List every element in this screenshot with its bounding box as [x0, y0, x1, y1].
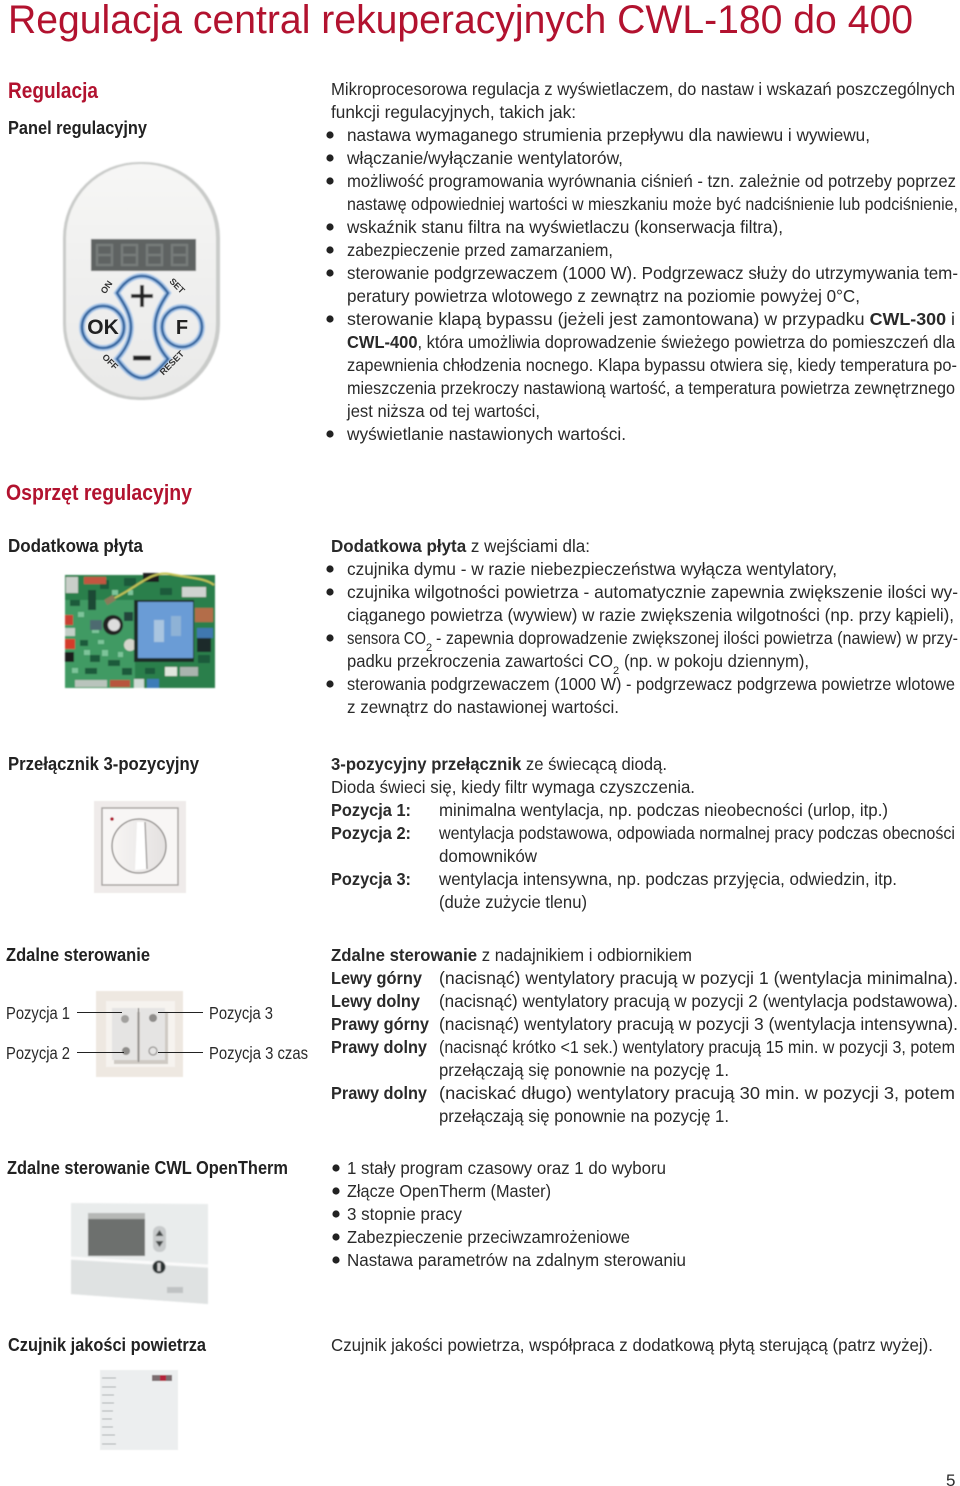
icon: control panel photo: ON — [99, 279, 115, 296]
text block: intro and feature list — [326, 79, 958, 444]
text block: OpenTherm feature list: Złącze OpenTherm (Master) — [347, 1181, 551, 1201]
text block: remote control description: przełączają się ponownie na pozycję 1. — [439, 1060, 729, 1080]
text block: intro and feature list: włączanie/wyłączanie wentylatorów, — [346, 148, 623, 168]
text block: remote control description: (nacisnąć) wentylatory pracują w pozycji 2 (wentylacja podstawowa). — [439, 991, 958, 1011]
text block: Dodatkowa płyta description: padku przekroczenia zawartości CO — [347, 651, 613, 671]
text block: switch description: Pozycja 1: — [331, 800, 411, 820]
panel: Przełącznik 3-pozycyjny — [8, 754, 955, 912]
callout: Pozycja 1 — [6, 1003, 122, 1023]
text block: Dodatkowa płyta description: czujnika dymu - w razie niebezpieczeństwa wyłącza wentylatory, — [347, 559, 837, 579]
text block: Dodatkowa płyta description — [326, 536, 958, 717]
text block: intro and feature list: zabezpieczenie przed zamarzaniem, — [347, 240, 613, 260]
text block: intro and feature list: peratury powietrza wlotowego z zewnątrz na poziomie powyżej 0°C, — [347, 286, 860, 306]
text block: Dodatkowa płyta description: ciąganego powietrza (wywiew) w razie zwiększenia wilgotności (np. przy kąpieli), — [347, 605, 954, 625]
text block: remote control description — [331, 945, 958, 1126]
icon: control panel photo: F — [176, 317, 188, 339]
text block: Dodatkowa płyta description: czujnika wilgotności powietrza - automatycznie zapewnia zwiększenie ilości wy- — [347, 582, 958, 602]
text block: Dodatkowa płyta description: z zewnątrz do nastawionej wartości. — [347, 697, 619, 717]
icon: control panel photo: RESET — [158, 348, 186, 377]
callout: Pozycja 2: Pozycja 2 — [6, 1043, 70, 1063]
text block: intro and feature list: wyświetlanie nastawionych wartości. — [346, 424, 626, 444]
heading: Regulacja: Regulacja — [8, 78, 99, 103]
text block: OpenTherm feature list: 1 stały program czasowy oraz 1 do wyboru — [347, 1158, 666, 1178]
text block: switch description: 3-pozycyjny przełącznik ze świecącą diodą. — [331, 754, 667, 774]
text block: Dodatkowa płyta description: 2 — [613, 665, 619, 677]
heading: Czujnik jakości powietrza: Czujnik jakości powietrza — [8, 1335, 207, 1355]
heading: Dodatkowa płyta: Dodatkowa płyta — [8, 536, 144, 556]
callout: Pozycja 3 czas: Pozycja 3 czas — [209, 1043, 308, 1063]
callout: Pozycja 3 — [158, 1003, 273, 1023]
text block: OpenTherm feature list: 3 stopnie pracy — [347, 1204, 462, 1224]
icon: circuit board photo — [65, 573, 215, 688]
text block: intro and feature list: wskaźnik stanu filtra na wyświetlaczu (konserwacja filtra), — [346, 217, 783, 237]
text block: switch description: wentylacja intensywna, np. podczas przyjęcia, odwiedzin, itp. — [438, 869, 897, 889]
text block: OpenTherm feature list — [332, 1158, 686, 1270]
text block: switch description: minimalna wentylacja, np. podczas nieobecności (urlop, itp.) — [439, 800, 888, 820]
text block: remote control description: Prawy górny — [331, 1014, 429, 1034]
icon: control panel photo: SET — [167, 276, 187, 296]
callout: Pozycja 2 — [6, 1043, 124, 1063]
text block: switch description: domowników — [439, 846, 537, 866]
text block: remote control description: Lewy górny — [331, 968, 422, 988]
text block: switch description: Pozycja 3: — [331, 869, 411, 889]
text block: remote control description: Prawy dolny — [331, 1037, 427, 1057]
icon: control panel photo — [63, 162, 220, 400]
icon: control panel photo: OFF — [100, 352, 120, 372]
text block: remote control description: przełączają się ponownie na pozycję 1. — [439, 1106, 729, 1126]
panel: Zdalne sterowanie — [6, 945, 958, 1126]
text block: sensor description: Czujnik jakości powietrza, współpraca z dodatkową płytą sterującą (patrz wyżej). — [331, 1335, 933, 1355]
text block: intro and feature list: nastawa wymaganego strumienia przepływu dla nawiewu i wywiewu, — [347, 125, 870, 145]
callout: Pozycja 3: Pozycja 3 — [209, 1003, 273, 1023]
icon: control panel photo: OK — [87, 316, 119, 339]
panel: Czujnik jakości powietrza — [8, 1335, 933, 1450]
text block: remote control description: Lewy dolny — [331, 991, 420, 1011]
text block: intro and feature list: jest niższa od tej wartości, — [346, 401, 540, 421]
heading: Panel regulacyjny: Panel regulacyjny — [8, 118, 147, 138]
heading: Osprzęt regulacyjny: Osprzęt regulacyjny — [6, 480, 193, 505]
text block: Dodatkowa płyta description: sensora CO — [347, 628, 426, 648]
text block: remote control description: (nacisnąć) wentylatory pracują w pozycji 1 (wentylacja minimalna). — [439, 968, 958, 988]
icon: remote control switch photo — [96, 991, 183, 1077]
text block: switch description: Dioda świeci się, kiedy filtr wymaga czyszczenia. — [331, 777, 695, 797]
text block: remote control description: Zdalne sterowanie z nadajnikiem i odbiornikiem — [331, 945, 692, 965]
icon: OpenTherm controller photo — [71, 1203, 208, 1304]
text block: Dodatkowa płyta description: (np. w pokoju dziennym), — [624, 651, 809, 671]
text block: intro and feature list: funkcji regulacyjnych, takich jak: — [331, 102, 576, 122]
icon: air quality sensor photo — [100, 1370, 178, 1450]
heading: Zdalne sterowanie: Zdalne sterowanie — [6, 945, 150, 965]
text block: Dodatkowa płyta description: 2 — [426, 642, 432, 654]
panel: Zdalne sterowanie CWL OpenTherm — [7, 1158, 686, 1304]
text block: remote control description: Prawy dolny — [331, 1083, 427, 1103]
text block: intro and feature list: sterowanie klapą bypassu (jeżeli jest zamontowana) w przypadku CWL-300 i — [347, 309, 955, 329]
text block: OpenTherm feature list: Nastawa parametrów na zdalnym sterowaniu — [347, 1250, 686, 1270]
text block: OpenTherm feature list: Zabezpieczenie przeciwzamrożeniowe — [347, 1227, 630, 1247]
text block: remote control description: (nacisnąć) wentylatory pracują w pozycji 3 (wentylacja intensywna). — [439, 1014, 958, 1034]
text block: switch description — [331, 754, 955, 912]
heading: Zdalne sterowanie CWL OpenTherm: Zdalne sterowanie CWL OpenTherm — [7, 1158, 288, 1178]
panel: Regulacja — [8, 79, 958, 444]
heading: Przełącznik 3-pozycyjny: Przełącznik 3-pozycyjny — [8, 754, 199, 774]
text block: switch description: Pozycja 2: — [331, 823, 411, 843]
text block: switch description: (duże zużycie tlenu) — [439, 892, 587, 912]
text block: intro and feature list: sterowanie podgrzewaczem (1000 W). Podgrzewacz służy do utrzymywania tem- — [347, 263, 958, 283]
text block: Dodatkowa płyta description: Dodatkowa płyta z wejściami dla: — [331, 536, 590, 556]
panel: Dodatkowa płyta — [8, 536, 958, 717]
text block: remote control description: (naciskać długo) wentylatory pracują 30 min. w pozycji 3, potem — [439, 1083, 955, 1103]
callout: Pozycja 1: Pozycja 1 — [6, 1003, 70, 1023]
icon: 3-position switch photo — [94, 801, 186, 893]
